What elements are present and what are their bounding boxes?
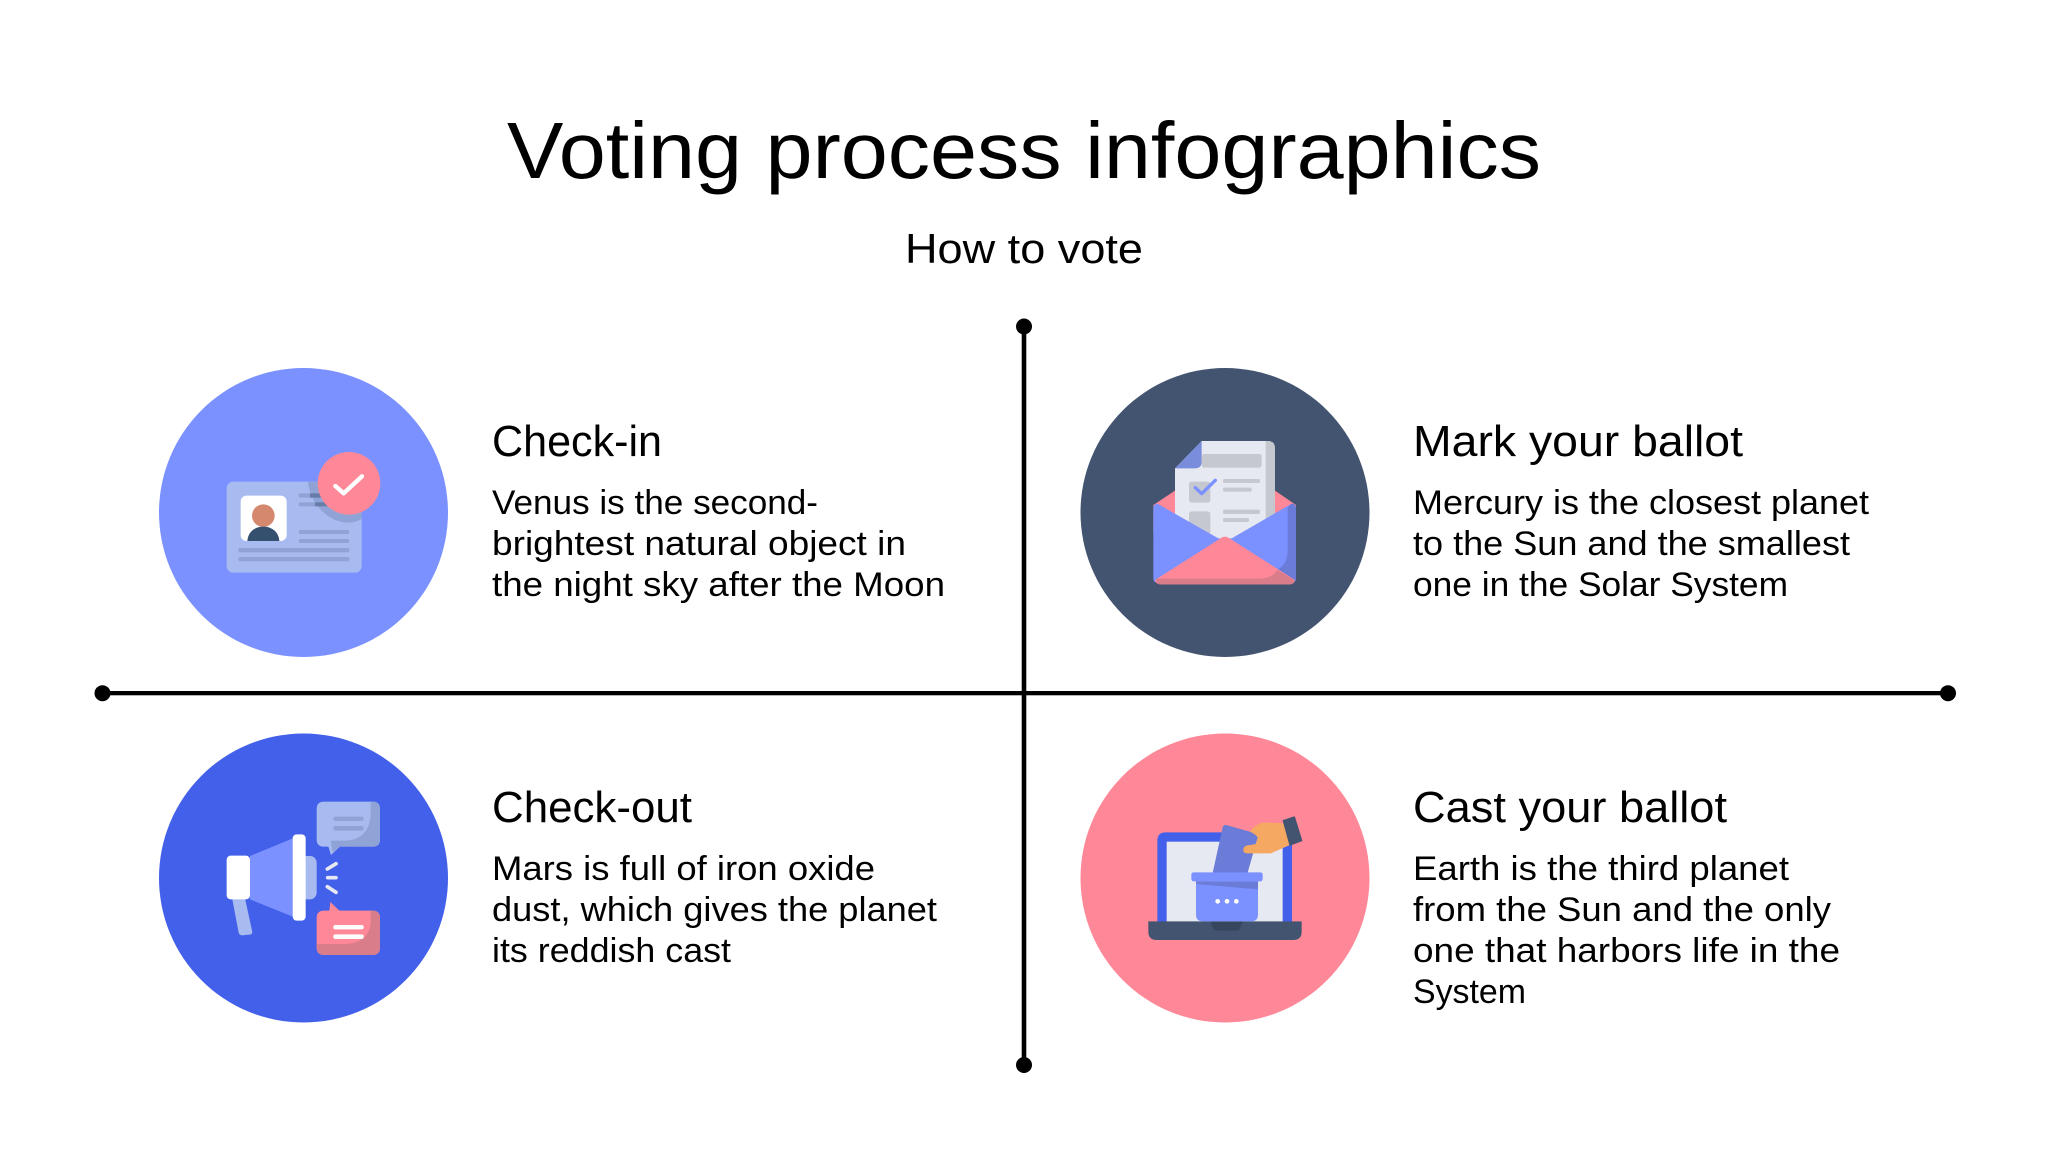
text: cast your ballot description: System [1413,973,1526,1011]
icon: megaphone with speech bubbles [227,802,380,955]
circle: check-out [159,734,448,1022]
text: mark your ballot description: to the Sun and the smallest [1413,525,1851,563]
text: check-out description: its reddish cast [492,932,732,970]
text: mark your ballot description: Mercury is the closest planet [1413,484,1870,522]
text: check-out description: dust, which gives the planet [492,891,938,929]
text: mark your ballot description [1413,484,1870,604]
text: check-in description: the night sky after the Moon [492,566,945,604]
title: Voting process infographics [507,106,1541,195]
heading: check-out: Check-out [492,783,692,832]
horizontal axis with end dots [94,685,1956,701]
subtitle: How to vote [905,225,1143,272]
panel: check-out [159,734,938,1022]
heading: check-in: Check-in [492,417,662,466]
text: check-out description [492,850,938,970]
icon: envelope with ballot [1153,441,1296,584]
circle: cast your ballot [1080,734,1370,1022]
icon: ID card with check mark [227,452,380,573]
vertical axis with end dots [1016,318,1032,1073]
text: mark your ballot description: one in the Solar System [1413,566,1788,604]
text: check-out description: Mars is full of iron oxide [492,850,875,888]
text: check-in description: Venus is the second- [492,484,818,522]
text: cast your ballot description: Earth is the third planet [1413,850,1790,888]
circle: mark your ballot [1080,368,1370,657]
panel: mark your ballot [1080,368,1870,657]
text: check-in description: brightest natural object in [492,525,906,563]
text: check-in description [492,484,945,604]
circle: check-in [159,368,448,657]
icon: laptop with ballot box [1148,817,1302,940]
heading: cast your ballot: Cast your ballot [1413,783,1727,832]
heading: mark your ballot: Mark your ballot [1413,417,1743,466]
text: cast your ballot description: one that harbors life in the [1413,932,1840,970]
text: cast your ballot description [1413,850,1840,1011]
panel: check-in [159,368,945,657]
panel: cast your ballot [1080,734,1840,1022]
text: cast your ballot description: from the Sun and the only [1413,891,1831,929]
